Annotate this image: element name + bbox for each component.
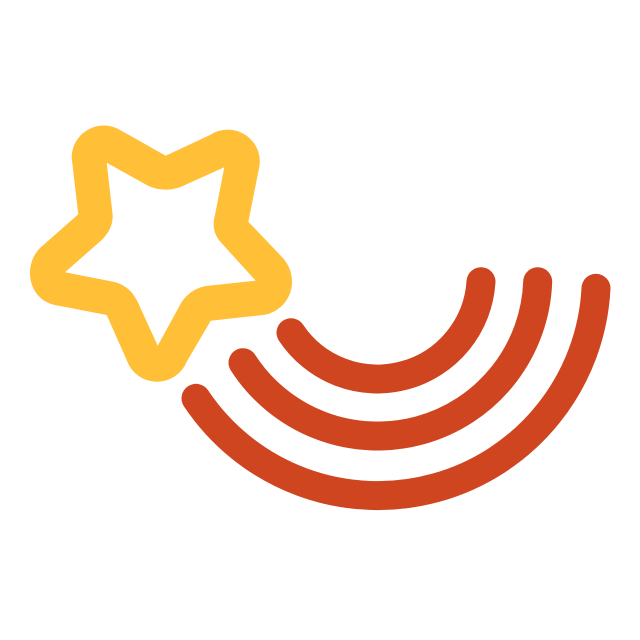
icon: inner tail arc [291,282,481,379]
icon: outer tail arc [196,288,596,496]
icon: middle tail arc [243,282,538,436]
icon: star outline [30,126,292,382]
